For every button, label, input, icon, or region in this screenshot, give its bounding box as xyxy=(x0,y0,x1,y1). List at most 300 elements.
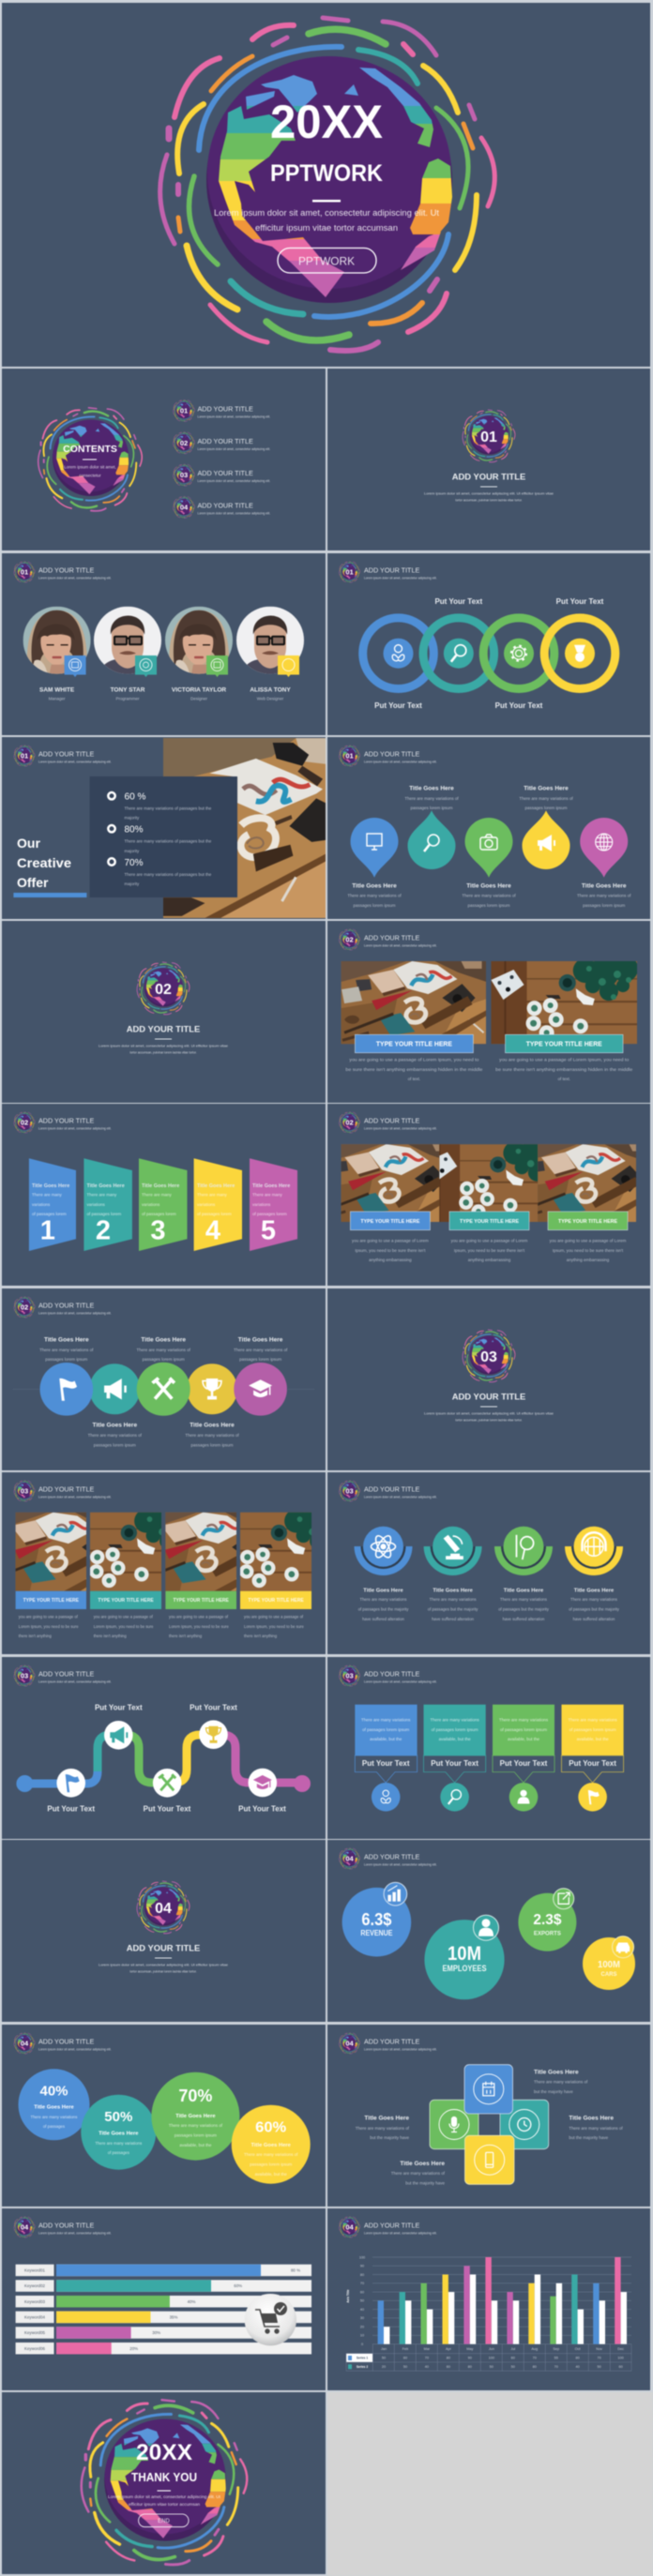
slide header xyxy=(339,2033,437,2054)
bubble 40%: of passages xyxy=(43,2124,65,2129)
panel: section 02 xyxy=(2,921,326,1103)
slide header: ADD YOUR TITLE xyxy=(38,566,94,574)
bar Keyword04 xyxy=(16,2312,311,2323)
captions: you are going to use a passage of Lorem xyxy=(550,1238,627,1243)
badge labels: have suffered alteration xyxy=(362,1617,405,1621)
hero button xyxy=(278,248,376,273)
contents description xyxy=(64,465,116,478)
table series 1 values: 90 xyxy=(468,2357,472,2360)
bar Keyword05: 30% xyxy=(152,2330,160,2335)
heading: Creative xyxy=(17,855,71,870)
card label 2 xyxy=(505,1034,623,1053)
path labels xyxy=(47,1703,286,1814)
table months: Aug xyxy=(531,2347,538,2351)
slide header: ADD YOUR TITLE xyxy=(38,1302,94,1309)
callout yellow: available, but the xyxy=(577,1737,609,1741)
member: Tony Star xyxy=(94,607,161,701)
ring labels: Put Your Text xyxy=(374,701,422,710)
bubble 60%: There are many variations of xyxy=(244,2152,298,2157)
trapezoid 3: of passages lorem xyxy=(142,1212,176,1216)
badge labels: Title Goes Here xyxy=(504,1588,544,1593)
circle labels: passages lorem ipsum xyxy=(45,1357,88,1362)
bubble 40% xyxy=(19,2069,90,2140)
bar Keyword01 xyxy=(16,2265,311,2276)
photo 2 xyxy=(439,1144,539,1223)
captions xyxy=(352,1238,627,1262)
slide header: ADD YOUR TITLE xyxy=(38,1116,94,1125)
member: Alissa Tony: ALISSA TONY xyxy=(250,686,291,694)
ring 1 xyxy=(363,618,433,688)
trapezoid 5: variations xyxy=(252,1202,271,1207)
pin labels: passages lorem ipsum xyxy=(467,903,510,908)
ring 2 xyxy=(423,618,494,688)
table series 1 values: 100 xyxy=(489,2357,494,2360)
stat 70%: 70% xyxy=(124,858,144,868)
slide header xyxy=(14,562,112,582)
panel: four photo columns xyxy=(0,1472,347,1654)
section number: 03 xyxy=(480,1349,497,1365)
photo 3 xyxy=(537,1144,637,1223)
stat 60%: majority xyxy=(124,816,140,821)
circle teal xyxy=(89,1363,140,1414)
column text xyxy=(19,1615,304,1638)
member: Sam White: Manager xyxy=(49,696,66,701)
table series 1 values: 60 xyxy=(511,2357,515,2360)
slide header: 02 xyxy=(345,1118,354,1127)
trapezoid 4: There are many xyxy=(197,1193,228,1197)
panel: column chart xyxy=(327,2208,650,2390)
bar Keyword02: 60% xyxy=(234,2283,242,2288)
panel: winding path timeline xyxy=(2,1657,326,1839)
closing description: Lorem ipsum dolor sit amet, consectetur adipiscing elit. Ut xyxy=(108,2494,221,2499)
tile labels: There are many variations of xyxy=(391,2171,446,2176)
card text 2: you are going to use a passage of Lorem Ipsum, you need to xyxy=(499,1058,630,1062)
label 3 xyxy=(548,1212,628,1230)
column text: you are going to use a passage of xyxy=(19,1615,79,1619)
pin labels: There are many variations of xyxy=(347,893,402,898)
section description: tortor accumsan, pulvinar lorem lacinia vitae tortor. xyxy=(455,498,523,502)
table series 1 values: 50 xyxy=(382,2357,386,2360)
hero description: Lorem ipsum dolor sit amet, consectetur adipiscing elit. Ut xyxy=(214,208,440,218)
circle labels: passages lorem ipsum xyxy=(239,1357,281,1362)
panel: metric bubbles xyxy=(327,1840,650,2022)
ring labels: Put Your Text xyxy=(495,701,543,710)
column text: you are going to use a passage of xyxy=(169,1615,229,1619)
bubble revenue: REVENUE xyxy=(360,1929,393,1937)
heading: Offer xyxy=(17,875,49,890)
tile labels: Title Goes Here xyxy=(400,2161,445,2167)
slide header: ADD YOUR TITLE xyxy=(38,1485,94,1493)
table months: Oct xyxy=(575,2347,581,2351)
node cap xyxy=(248,1769,277,1797)
slide header xyxy=(14,746,112,766)
slide header: 01 xyxy=(345,568,354,576)
callout green: available, but the xyxy=(508,1737,540,1741)
series 2 bars xyxy=(384,2275,627,2344)
slide header xyxy=(14,1481,112,1501)
pin labels: passages lorem ipsum xyxy=(353,903,396,908)
tile labels: Title Goes Here xyxy=(534,2069,579,2075)
circle labels: There are many variations of xyxy=(88,1433,143,1438)
table series 1 values: 80 xyxy=(447,2357,450,2360)
callout green: There are many variations xyxy=(499,1718,549,1722)
panel: bowl badges xyxy=(327,1472,650,1654)
label 1 xyxy=(350,1212,430,1230)
tile labels: but the majority have xyxy=(569,2135,609,2140)
stat 80%: majority xyxy=(124,849,140,853)
panel: cross of rounded tiles xyxy=(327,2025,650,2207)
slide header: ADD YOUR TITLE xyxy=(364,2037,419,2046)
contents item 04 xyxy=(173,496,270,519)
circle violet xyxy=(234,1363,287,1416)
trapezoid 2: of passages lorem xyxy=(86,1212,122,1216)
contents item 03 xyxy=(173,464,270,486)
column text: there isn't anything xyxy=(94,1634,127,1638)
bubble 50%: Title Goes Here xyxy=(99,2131,139,2136)
section description xyxy=(424,1412,554,1422)
circle labels: passages lorem ipsum xyxy=(143,1357,185,1362)
trapezoid 1 xyxy=(29,1158,76,1251)
captions: you are going to use a passage of Lorem xyxy=(451,1238,528,1243)
section description xyxy=(99,1964,228,1973)
table series 2 values: 70 xyxy=(554,2365,558,2369)
badge yellow xyxy=(565,1527,623,1575)
slide header: ADD YOUR TITLE xyxy=(364,1669,419,1679)
callout blue xyxy=(355,1705,418,1812)
trapezoid 3: Title Goes Here xyxy=(142,1183,179,1189)
table series 1 values: 60 xyxy=(403,2357,407,2360)
badge labels: Title Goes Here xyxy=(433,1588,474,1593)
data table: Series 1 xyxy=(357,2357,368,2360)
y axis labels: 100 xyxy=(359,2255,365,2259)
table series 2 values: 50 xyxy=(597,2365,601,2369)
bubble revenue: 6.3$ xyxy=(361,1910,391,1929)
slide header: Lorem ipsum dolor sit amet, consectetur adipiscing elit. xyxy=(38,1680,112,1684)
slide header xyxy=(339,1112,437,1133)
section description xyxy=(424,492,554,502)
panel: callout boxes xyxy=(327,1657,650,1839)
tile labels: There are many variations of xyxy=(534,2080,588,2084)
icon: cart badge xyxy=(245,2294,296,2345)
circle labels: There are many variations of xyxy=(185,1433,239,1438)
table months: Feb xyxy=(402,2347,408,2351)
bubble employees: EMPLOYEES xyxy=(443,1964,486,1973)
contents item 03: Lorem ipsum dolor sit amet, consectetur adipiscing elit. xyxy=(197,479,270,483)
hero title: 20XX xyxy=(270,96,383,148)
column text: there isn't anything xyxy=(19,1634,52,1638)
y axis labels: 30 xyxy=(360,2316,364,2320)
slide header: 04 xyxy=(345,2039,354,2048)
label 2: TYPE YOUR TITLE HERE xyxy=(460,1219,519,1225)
section description: tortor accumsan, pulvinar lorem lacinia vitae tortor. xyxy=(129,1050,197,1054)
callout yellow xyxy=(561,1705,624,1812)
member: Victoria Taylor xyxy=(165,607,233,701)
trapezoid 2: There are many xyxy=(86,1193,117,1197)
slide header: Lorem ipsum dolor sit amet, consectetur adipiscing elit. xyxy=(38,1495,112,1499)
pin labels: There are many variations of xyxy=(577,893,631,898)
badge labels: of passages but the majority xyxy=(498,1607,550,1611)
slide header: 02 xyxy=(345,936,354,943)
hero globe xyxy=(160,18,494,351)
ring labels xyxy=(374,597,604,710)
series 1 bars xyxy=(378,2257,621,2344)
panel: team slide xyxy=(2,553,326,735)
badge labels xyxy=(358,1588,620,1621)
table series 1 values: 55 xyxy=(554,2357,558,2360)
contents item 01: 01 xyxy=(180,407,188,414)
section number: 04 xyxy=(155,1901,172,1917)
slide header: Lorem ipsum dolor sit amet, consectetur adipiscing elit. xyxy=(364,1862,437,1866)
pin labels: Title Goes Here xyxy=(409,785,454,791)
table series 2 values: 80 xyxy=(533,2365,537,2369)
section description xyxy=(99,1045,228,1054)
table series 2 values: 80 xyxy=(468,2365,472,2369)
table months: Dec xyxy=(617,2347,624,2351)
badge teal xyxy=(424,1527,482,1575)
data table xyxy=(346,2344,631,2371)
slide header: 04 xyxy=(345,2222,354,2232)
closing subtitle: THANK YOU xyxy=(131,2470,197,2484)
closing button: END xyxy=(158,2519,170,2524)
card label 1 xyxy=(355,1034,473,1053)
bar Keyword01: 80 % xyxy=(291,2267,300,2273)
bar Keyword02 xyxy=(16,2280,311,2292)
stat 70% xyxy=(108,858,212,886)
callout teal xyxy=(424,1705,486,1812)
trapezoid 4: Title Goes Here xyxy=(197,1183,235,1189)
y axis labels: 10 xyxy=(360,2334,364,2338)
ring 4 xyxy=(544,618,615,688)
contents item 02 xyxy=(173,432,270,454)
slide header: 02 xyxy=(21,1303,28,1311)
badge labels: Title Goes Here xyxy=(363,1588,403,1593)
card text 1: of text. xyxy=(408,1077,420,1081)
pin labels: Title Goes Here xyxy=(352,882,397,889)
callout yellow: Put Your Text xyxy=(569,1759,616,1768)
slide header xyxy=(14,2217,112,2237)
trapezoid 3: There are many xyxy=(142,1193,173,1197)
section number: 01 xyxy=(480,429,497,445)
slide header: ADD YOUR TITLE xyxy=(364,934,419,942)
slide header: ADD YOUR TITLE xyxy=(38,750,94,758)
tile green xyxy=(430,2100,478,2149)
y axis labels: 20 xyxy=(360,2326,364,2329)
trapezoid 1: of passages lorem xyxy=(32,1212,67,1216)
path labels: Put Your Text xyxy=(144,1805,191,1814)
circle labels: There are many variations of xyxy=(234,1348,288,1352)
slide header: ADD YOUR TITLE xyxy=(38,1669,94,1679)
table series 1 values: 100 xyxy=(617,2357,624,2360)
badge labels: of passages but the majority xyxy=(358,1607,409,1611)
photo 4 xyxy=(239,1512,311,1592)
node trophy xyxy=(199,1720,228,1749)
bar Keyword06: 20% xyxy=(129,2346,138,2351)
pin labels: There are many variations of xyxy=(519,796,573,801)
trapezoid 1: 1 xyxy=(40,1215,55,1245)
bar Keyword06: Keyword06 xyxy=(24,2346,46,2351)
trapezoid 2: Title Goes Here xyxy=(86,1183,125,1189)
table months: Apr xyxy=(446,2347,452,2351)
tile labels xyxy=(356,2069,623,2185)
column text: there isn't anything xyxy=(169,1634,203,1638)
slide header: Lorem ipsum dolor sit amet, consectetur adipiscing elit. xyxy=(38,2048,112,2052)
bubble cars xyxy=(583,1936,635,1990)
y axis labels: 50 xyxy=(360,2299,364,2303)
circle labels: There are many variations of xyxy=(137,1348,191,1352)
section number: 02 xyxy=(155,982,172,998)
heading: Our xyxy=(17,836,40,851)
slide header xyxy=(339,562,437,582)
section description: tortor accumsan, pulvinar lorem lacinia vitae tortor. xyxy=(455,1418,523,1422)
bubble 40%: There are many variations xyxy=(31,2115,77,2119)
column text: Lorem Ipsum, you need to be sure xyxy=(169,1624,229,1629)
stat 60%: There are many variations of passages but the xyxy=(124,806,212,810)
badge blue xyxy=(355,1527,413,1575)
hero subtitle: PPTWORK xyxy=(270,160,383,187)
stat 60%: 60 % xyxy=(124,791,146,803)
y axis labels: 90 xyxy=(360,2265,364,2268)
column labels: TYPE YOUR TITLE HERE xyxy=(248,1598,304,1604)
circle labels: There are many variations of xyxy=(39,1348,94,1352)
panel: pins xyxy=(327,737,650,919)
slide header: 03 xyxy=(21,1671,28,1680)
pin yellow xyxy=(522,810,570,869)
callout green: of passages lorem ipsum xyxy=(500,1727,547,1732)
table months: Jun xyxy=(489,2347,494,2351)
closing title: 20XX xyxy=(136,2440,193,2465)
table series 1 values: 70 xyxy=(425,2357,429,2360)
bubble 40%: Title Goes Here xyxy=(34,2104,74,2110)
panel: icon circles row xyxy=(2,1288,326,1470)
table series 1 values xyxy=(382,2357,624,2360)
section heading: ADD YOUR TITLE xyxy=(127,1943,200,1952)
badge labels: have suffered alteration xyxy=(503,1617,545,1621)
pin labels: There are many variations of xyxy=(404,796,459,801)
column labels: TYPE YOUR TITLE HERE xyxy=(98,1598,154,1604)
pin labels: passages lorem ipsum xyxy=(524,806,568,810)
y axis labels: 0 xyxy=(361,2343,363,2346)
captions: anything embarrassing xyxy=(567,1258,610,1262)
column labels xyxy=(16,1591,311,1609)
panel: section 01 xyxy=(327,369,650,550)
slide header: ADD YOUR TITLE xyxy=(364,1485,419,1493)
circle labels: Title Goes Here xyxy=(190,1423,235,1429)
label 1: TYPE YOUR TITLE HERE xyxy=(360,1219,420,1225)
section description: Lorem ipsum dolor sit amet, consectetur adipiscing elit. Ut efficitur ipsum vitae xyxy=(424,492,554,496)
callout blue: available, but the xyxy=(370,1737,402,1741)
slide header xyxy=(14,1665,112,1686)
member: Tony Star: Programmer xyxy=(115,696,140,701)
pin labels: There are many variations of xyxy=(462,893,516,898)
hero description: efficitur ipsum vitae tortor accumsan xyxy=(255,223,398,233)
tile labels: Title Goes Here xyxy=(364,2116,409,2122)
tile teal xyxy=(500,2100,549,2149)
bubble exports: 2.3$ xyxy=(533,1912,561,1928)
path labels: Put Your Text xyxy=(238,1805,286,1814)
ring labels: Put Your Text xyxy=(556,597,604,606)
column text: you are going to use a passage of xyxy=(94,1615,154,1619)
stat 70%: There are many variations of passages but the xyxy=(124,872,212,877)
trapezoid 4: 4 xyxy=(205,1215,220,1245)
captions: anything embarrassing xyxy=(468,1258,511,1262)
card text 2: be sure there isn't anything embarrassing hidden in the middle xyxy=(495,1067,633,1072)
table months: Mar xyxy=(424,2347,431,2351)
column text: you are going to use a passage of xyxy=(244,1615,304,1619)
badge labels: have suffered alteration xyxy=(432,1617,475,1621)
badge labels: of passages but the majority xyxy=(569,1607,620,1611)
bubble 70%: passages lorem ipsum xyxy=(175,2132,217,2138)
bubble exports xyxy=(518,1889,576,1951)
tile labels: but the majority have xyxy=(405,2181,445,2185)
circle labels: Title Goes Here xyxy=(93,1423,137,1429)
contents item 04: 04 xyxy=(180,503,189,512)
photo 3 xyxy=(165,1512,237,1592)
callout teal: available, but the xyxy=(439,1737,471,1741)
callout teal: There are many variations xyxy=(430,1718,479,1722)
slide header: 04 xyxy=(345,1855,354,1862)
contents item 02: 02 xyxy=(180,439,188,447)
bubble 50%: There are many variations xyxy=(95,2141,142,2146)
circle blue xyxy=(40,1363,93,1416)
member: Alissa Tony: Web Designer xyxy=(257,696,284,701)
panel: interlocked rings xyxy=(327,553,650,735)
bar Keyword01: Keyword01 xyxy=(24,2267,46,2273)
slide header: Lorem ipsum dolor sit amet, consectetur adipiscing elit. xyxy=(364,2232,437,2236)
bar Keyword05: Keyword05 xyxy=(24,2330,46,2335)
contents heading: CONTENTS xyxy=(63,444,117,455)
photo: workshop table xyxy=(163,737,326,919)
callout teal: Put Your Text xyxy=(431,1759,478,1768)
slide header xyxy=(14,2033,112,2054)
table series 1 values: 70 xyxy=(533,2357,537,2360)
photo 2 xyxy=(89,1512,161,1592)
trapezoid 4: of passages lorem xyxy=(197,1212,232,1216)
badge labels: There are many variations xyxy=(360,1597,406,1602)
bar Keyword04: Keyword04 xyxy=(24,2314,46,2320)
slide header: ADD YOUR TITLE xyxy=(364,566,419,574)
bar Keyword05 xyxy=(16,2327,311,2339)
bubble 60%: available, but the xyxy=(255,2172,287,2177)
callout yellow: There are many variations xyxy=(568,1718,617,1722)
pin labels: passages lorem ipsum xyxy=(410,806,453,810)
circle yellow xyxy=(187,1363,237,1414)
slide header: ADD YOUR TITLE xyxy=(364,1853,419,1860)
callout green xyxy=(493,1705,554,1812)
bubble exports: EXPORTS xyxy=(534,1930,562,1936)
slide header: ADD YOUR TITLE xyxy=(38,2037,94,2046)
column labels: TYPE YOUR TITLE HERE xyxy=(23,1598,80,1604)
trapezoid 1: There are many xyxy=(32,1193,63,1197)
node flag xyxy=(56,1769,85,1798)
table series 2 values: 50 xyxy=(511,2365,515,2369)
contents item 01: Lorem ipsum dolor sit amet, consectetur adipiscing elit. xyxy=(197,414,270,418)
card text 1: be sure there isn't anything embarrassing hidden in the middle xyxy=(345,1067,483,1072)
slide header: Lorem ipsum dolor sit amet, consectetur adipiscing elit. xyxy=(364,1127,437,1131)
table months xyxy=(381,2347,624,2351)
pin green xyxy=(465,818,512,878)
table series 2 values xyxy=(382,2365,623,2369)
table series 1 values: 80 xyxy=(575,2357,580,2360)
slide header xyxy=(339,1481,437,1501)
contents item 02: ADD YOUR TITLE xyxy=(197,437,253,445)
trapezoid 1: Title Goes Here xyxy=(32,1183,69,1189)
slide header: Lorem ipsum dolor sit amet, consectetur adipiscing elit. xyxy=(38,760,112,763)
slide header xyxy=(339,1848,437,1869)
contents item 03: 03 xyxy=(180,471,188,479)
path labels: Put Your Text xyxy=(47,1805,95,1814)
bubble 60%: Title Goes Here xyxy=(251,2143,292,2148)
member: Tony Star: TONY STAR xyxy=(111,686,145,694)
